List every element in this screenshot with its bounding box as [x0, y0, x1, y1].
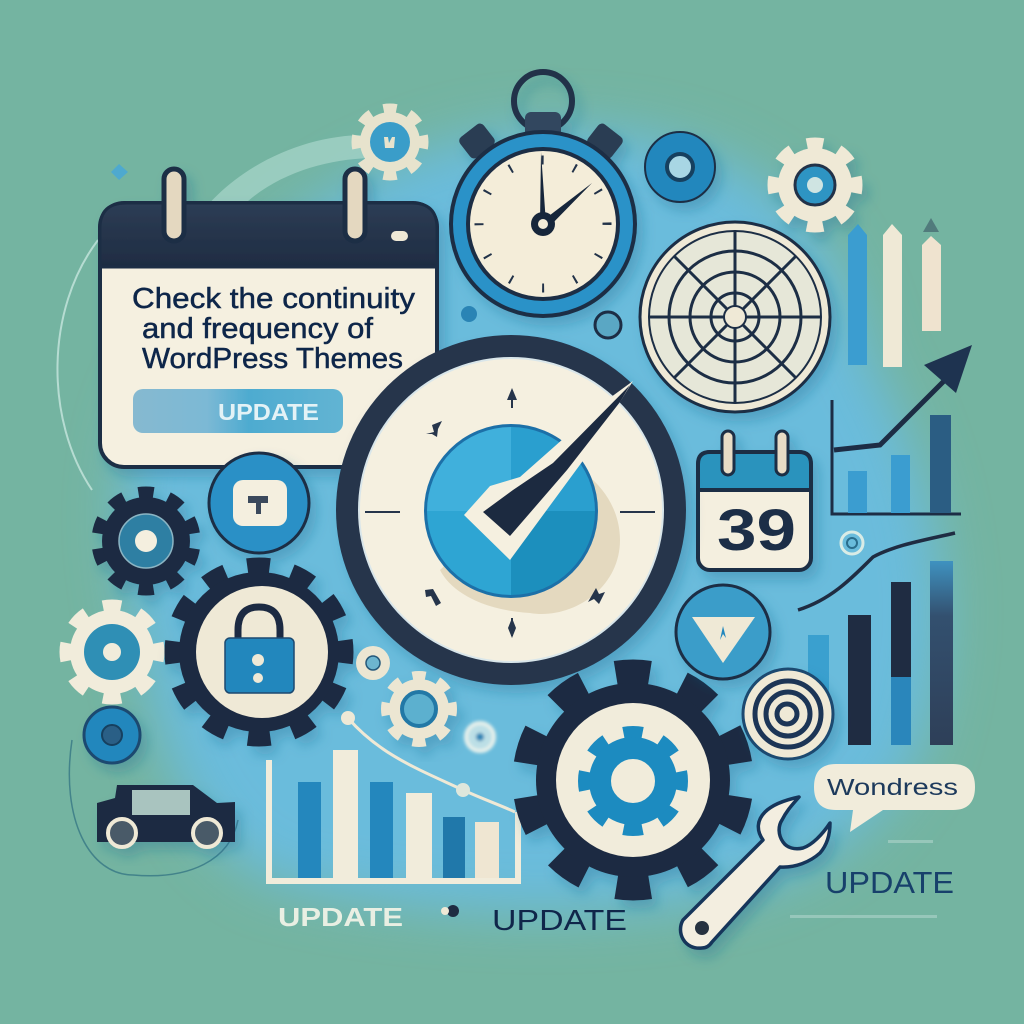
stopwatch — [451, 72, 635, 316]
small ring dots — [461, 306, 621, 338]
gear top right — [774, 144, 856, 226]
car orbit line — [69, 740, 238, 876]
faint caption below update — [790, 915, 937, 918]
calendar title text: Check the continuity — [132, 283, 416, 315]
speech bubble — [814, 764, 975, 832]
padlock — [238, 607, 280, 642]
small soft ring — [466, 723, 494, 751]
update button: UPDATE — [218, 399, 319, 425]
decorative light band — [188, 135, 370, 250]
triangle badge — [676, 585, 770, 679]
blue backdrop blob — [123, 130, 942, 913]
small calendar 39 — [698, 431, 811, 570]
main dial with check — [336, 335, 686, 685]
update label bottom center: UPDATE — [492, 905, 627, 937]
calendar header — [100, 203, 437, 267]
header pill — [391, 231, 408, 241]
dial ticks — [365, 392, 655, 636]
calendar panel — [100, 169, 437, 467]
blue cog — [584, 732, 682, 830]
calendar title text: WordPress Themes — [142, 343, 403, 375]
checkmark — [464, 381, 633, 560]
small sparkle left — [111, 164, 128, 180]
small gear center — [386, 676, 452, 742]
gear with padlock — [173, 566, 345, 738]
small ring lower left — [84, 707, 140, 763]
small nut center — [356, 646, 390, 680]
decorative thin arc — [57, 240, 98, 490]
spiral target — [743, 669, 833, 759]
calendar title text: and frequency of — [142, 313, 374, 345]
stopwatch hands — [540, 152, 592, 229]
center disc — [424, 424, 598, 598]
speech bubble: Wondress — [827, 774, 958, 800]
trend line — [798, 533, 955, 610]
update button — [133, 389, 343, 433]
gear left dark — [98, 493, 194, 589]
tall bar chart right — [798, 532, 955, 745]
small calendar 39: 39 — [717, 498, 796, 563]
gear left cream — [66, 606, 158, 698]
pencil bars top right — [848, 218, 941, 367]
car icon — [97, 785, 235, 847]
swirl icon — [841, 532, 863, 554]
small blue ring — [645, 132, 715, 202]
rising bar chart with arrow — [832, 345, 972, 514]
update label right: UPDATE — [825, 865, 954, 900]
blue circle badge — [209, 453, 309, 553]
calendar ring right — [345, 169, 365, 241]
update label bottom left: UPDATE — [278, 902, 403, 932]
faint caption above update — [888, 840, 933, 843]
large gear with blue cog — [525, 672, 741, 888]
bar chart bottom — [269, 711, 518, 881]
gear top left — [357, 109, 423, 175]
wrench — [680, 797, 830, 948]
calendar ring left — [164, 169, 184, 241]
disc shadow — [440, 460, 620, 614]
stopwatch loop — [514, 72, 572, 130]
calendar title text — [132, 283, 416, 375]
radar dial — [640, 222, 830, 412]
small dots — [441, 905, 459, 917]
